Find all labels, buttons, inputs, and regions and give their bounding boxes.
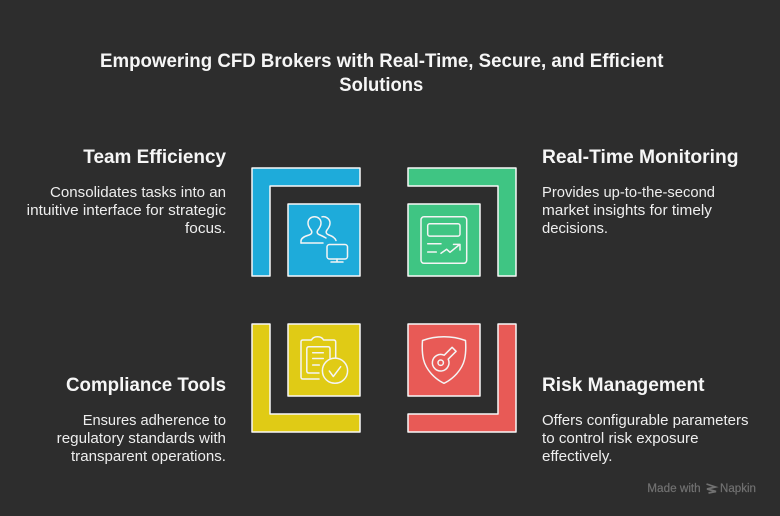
text block: compliance tools description: Ensures adherence to — [83, 412, 226, 429]
text block: compliance tools description: regulatory standards with — [57, 430, 226, 447]
panel: compliance tools text — [57, 375, 226, 465]
heading: compliance tools: Compliance Tools — [66, 375, 226, 396]
watermark: made with napkin — [647, 483, 756, 495]
text block: real-time monitoring description: Provides up-to-the-second — [542, 184, 715, 201]
icon: shield with key — [422, 337, 466, 383]
blue corner bracket — [252, 168, 360, 276]
panel: red bracket and icon — [408, 324, 516, 432]
icon: clipboard with check — [301, 337, 348, 383]
text block: real-time monitoring description — [542, 184, 715, 237]
text block: team efficiency description: focus. — [185, 220, 226, 237]
text block: real-time monitoring description: decisions. — [542, 220, 608, 237]
text block: team efficiency description: Consolidates tasks into an — [50, 184, 226, 201]
text block: compliance tools description — [57, 412, 226, 465]
text block: risk management description — [542, 412, 748, 465]
watermark: made with napkin: Napkin — [720, 483, 756, 495]
text block: real-time monitoring description: market insights for timely — [542, 202, 713, 219]
red corner bracket — [408, 324, 516, 432]
green square — [408, 204, 480, 276]
text block: team efficiency description — [27, 184, 227, 237]
heading: real-time monitoring: Real-Time Monitoring — [542, 147, 738, 168]
text block: risk management description: effectively. — [542, 448, 612, 465]
icon: dashboard with trend line — [421, 217, 467, 263]
panel: blue bracket and icon — [252, 168, 360, 276]
icon: napkin logo — [706, 484, 716, 493]
panel: yellow bracket and icon — [252, 324, 360, 432]
text block: team efficiency description: intuitive interface for strategic — [27, 202, 227, 219]
panel: risk management text — [542, 375, 748, 465]
text block: risk management description: to control risk exposure — [542, 430, 698, 447]
title: Empowering CFD Brokers with Real-Time, Secure, and Efficient — [100, 51, 664, 72]
yellow corner bracket — [252, 324, 360, 432]
blue square — [288, 204, 360, 276]
yellow square — [288, 324, 360, 396]
red square — [408, 324, 480, 396]
panel: real-time monitoring text — [542, 147, 738, 237]
text block: compliance tools description: transparent operations. — [71, 448, 226, 465]
icon: team and monitor — [301, 217, 348, 262]
panel: green bracket and icon — [408, 168, 516, 276]
panel: team efficiency text — [27, 147, 227, 237]
heading: team efficiency: Team Efficiency — [83, 147, 226, 168]
heading: risk management: Risk Management — [542, 375, 705, 396]
watermark: made with napkin: Made with — [647, 483, 701, 495]
title — [100, 51, 664, 96]
text block: risk management description: Offers configurable parameters — [542, 412, 748, 429]
title: Solutions — [339, 75, 423, 96]
green corner bracket — [408, 168, 516, 276]
